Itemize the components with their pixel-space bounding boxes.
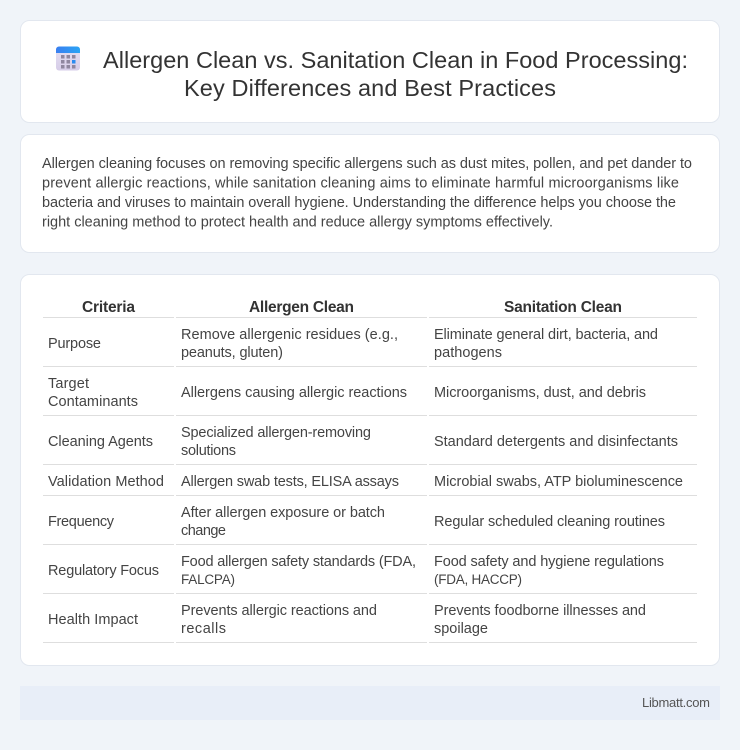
row: regulatory focus: Food safety and hygiene regulations <box>434 554 664 570</box>
icon: calendar <box>56 46 80 70</box>
row: target contaminants: Allergens causing allergic reactions <box>181 385 407 401</box>
row: purpose <box>43 327 697 367</box>
row: health impact: recalls <box>181 621 226 637</box>
row: validation method <box>43 474 697 496</box>
table header row <box>43 299 697 318</box>
text block: intro paragraph <box>42 156 692 230</box>
title: Allergen Clean vs. Sanitation Clean in Food Processing: <box>103 47 688 73</box>
row: validation method: Allergen swab tests, ELISA assays <box>181 474 399 490</box>
text block: intro paragraph: prevent allergic reactions, while sanitation cleaning aims to eliminate harmful microorganisms like <box>42 176 679 192</box>
row: validation method: Validation Method <box>48 474 164 490</box>
row: regulatory focus: Regulatory Focus <box>48 563 159 579</box>
title <box>103 47 688 101</box>
row: frequency: Frequency <box>48 514 115 530</box>
row: regulatory focus: FALCPA) <box>181 572 235 587</box>
panel: comparison table <box>20 274 720 666</box>
row: regulatory focus: (FDA, HACCP) <box>434 572 522 587</box>
row: health impact: Health Impact <box>48 612 138 628</box>
row: frequency: Regular scheduled cleaning routines <box>434 514 665 530</box>
title: Key Differences and Best Practices <box>184 75 556 101</box>
row: purpose: Purpose <box>48 336 101 352</box>
row: validation method: Microbial swabs, ATP bioluminescence <box>434 474 683 490</box>
table header row: Sanitation Clean <box>504 299 622 316</box>
text block: intro paragraph: bacteria and viruses to maintain overall hygiene. Understanding the difference helps you choose the <box>42 195 676 211</box>
row: health impact <box>43 603 697 643</box>
row: purpose: peanuts, gluten) <box>181 345 283 361</box>
row: target contaminants: Target <box>48 376 89 392</box>
table header row: Criteria <box>82 299 135 316</box>
row: cleaning agents: Specialized allergen-removing <box>181 425 371 441</box>
row: target contaminants <box>43 376 697 416</box>
row: purpose: Eliminate general dirt, bacteria, and <box>434 327 658 343</box>
text block: intro paragraph: Allergen cleaning focuses on removing specific allergens such as dust mites, pollen, and pet dander to <box>42 156 692 172</box>
table header row: Allergen Clean <box>249 299 354 316</box>
text block: intro paragraph: right cleaning method to protect health and reduce allergy symptoms effectively. <box>42 214 553 230</box>
footer credit: Libmatt.com <box>642 695 710 710</box>
footer bar <box>20 686 720 720</box>
row: cleaning agents: solutions <box>181 443 236 459</box>
row: purpose: pathogens <box>434 345 502 361</box>
row: health impact: Prevents allergic reactions and <box>181 603 377 619</box>
row: health impact: spoilage <box>434 621 488 637</box>
row: cleaning agents <box>43 425 697 465</box>
panel: introduction <box>20 134 720 252</box>
row: regulatory focus: Food allergen safety standards (FDA, <box>181 554 416 570</box>
row: target contaminants: Contaminants <box>48 394 138 410</box>
row: cleaning agents: Cleaning Agents <box>48 434 153 450</box>
row: purpose: Remove allergenic residues (e.g., <box>181 327 398 343</box>
row: health impact: Prevents foodborne illnesses and <box>434 603 646 619</box>
row: frequency <box>43 505 697 545</box>
row: regulatory focus <box>43 554 697 594</box>
row: cleaning agents: Standard detergents and disinfectants <box>434 434 678 450</box>
row: frequency: change <box>181 523 226 539</box>
panel: header <box>20 20 720 122</box>
row: target contaminants: Microorganisms, dust, and debris <box>434 385 646 401</box>
row: frequency: After allergen exposure or batch <box>181 505 385 521</box>
